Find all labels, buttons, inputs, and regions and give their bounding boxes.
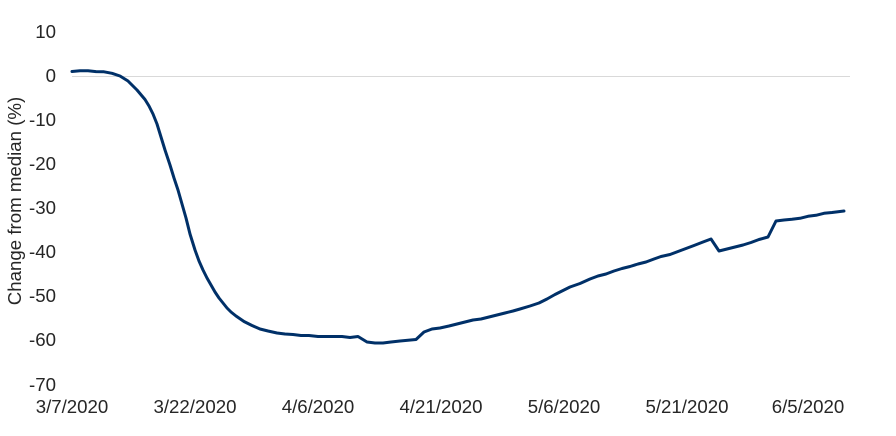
data line (72, 71, 844, 343)
x axis labels: 4/6/2020 (282, 396, 354, 417)
y axis title: Change from median (%) (4, 97, 25, 305)
y axis labels: 10 (35, 21, 56, 42)
y axis labels (29, 21, 56, 395)
y axis labels: -30 (29, 197, 56, 218)
y axis labels: -40 (29, 241, 56, 262)
x axis labels: 5/6/2020 (528, 396, 600, 417)
y axis labels: -10 (29, 109, 56, 130)
x axis labels: 4/21/2020 (400, 396, 482, 417)
y axis labels: -50 (29, 285, 56, 306)
x axis labels: 3/22/2020 (154, 396, 236, 417)
x axis labels: 6/5/2020 (772, 396, 844, 417)
y axis labels: -60 (29, 329, 56, 350)
y axis labels: -20 (29, 153, 56, 174)
x axis labels (36, 396, 844, 417)
zero baseline (72, 76, 850, 78)
y axis labels: -70 (29, 374, 56, 395)
x axis labels: 5/21/2020 (646, 396, 728, 417)
y axis labels: 0 (46, 65, 56, 86)
x axis labels: 3/7/2020 (36, 396, 108, 417)
